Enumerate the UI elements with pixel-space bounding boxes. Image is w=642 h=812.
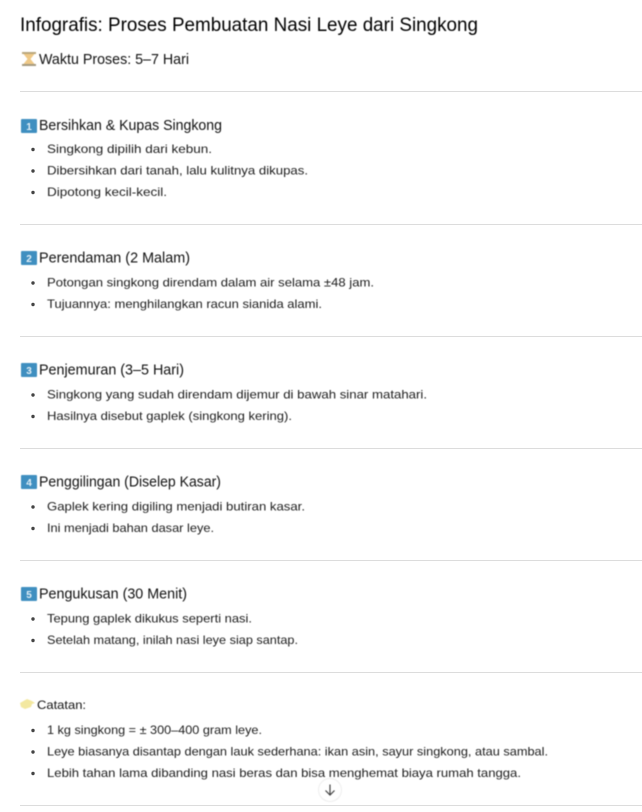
list: notes [31,724,548,780]
panel: step 2 [21,250,374,311]
icon: pointing hand [20,699,35,709]
list: notes: Leye biasanya disantap dengan lauk sederhana: ikan asin, sayur singkong, atau sambal. [47,746,548,758]
list: notes: 1 kg singkong = ± 300–400 gram leye. [47,724,262,737]
list: step 5: Tepung gaplek dikukus seperti nasi. [47,612,252,626]
process time: Waktu Proses: 5–7 Hari [39,52,189,68]
list: step 4: Gaplek kering digiling menjadi butiran kasar. [47,500,305,514]
list: step 5: Setelah matang, inilah nasi leye siap santap. [47,634,298,647]
panel: step 5 [21,586,298,647]
list: step 1: Dibersihkan dari tanah, lalu kulitnya dikupas. [47,164,308,178]
icon: number 1 [21,119,37,133]
icon: number 2 [21,251,37,265]
icon: hourglass [22,52,36,66]
list: step 2 [31,276,374,311]
list: step 4: Ini menjadi bahan dasar leye. [47,522,214,535]
panel: notes [20,699,548,780]
list: step 2: Potongan singkong direndam dalam air selama ±48 jam. [47,276,374,290]
icon: number 3: 3 [26,366,32,377]
icon: number 4 [21,475,37,489]
list: step 3: Singkong yang sudah direndam dijemur di bawah sinar matahari. [47,388,427,402]
list: step 3: Hasilnya disebut gaplek (singkong kering). [47,410,292,423]
list: step 5 [31,612,298,647]
title: Infografis: Proses Pembuatan Nasi Leye dari Singkong [20,14,478,36]
icon: number 5 [21,587,37,601]
heading: notes: Catatan: [37,699,86,712]
icon: number 4: 4 [26,478,32,489]
icon: number 5: 5 [26,590,32,601]
icon: scroll down arrow [318,778,342,802]
panel: step 4 [21,474,305,535]
heading: step 2: Perendaman (2 Malam) [39,250,190,266]
list: step 4 [31,500,305,535]
list: step 1: Singkong dipilih dari kebun. [47,143,212,156]
list: notes: Lebih tahan lama dibanding nasi beras dan bisa menghemat biaya rumah tangga. [47,767,521,780]
icon: number 1: 1 [26,122,32,133]
list: step 2: Tujuannya: menghilangkan racun sianida alami. [47,298,322,311]
list: step 1: Dipotong kecil-kecil. [47,186,167,199]
heading: step 4: Penggilingan (Diselep Kasar) [39,474,221,490]
heading: step 3: Penjemuran (3–5 Hari) [39,362,184,378]
list: step 1 [31,143,308,199]
icon: number 3 [21,363,37,377]
icon: number 2: 2 [26,254,32,265]
heading: step 1: Bersihkan & Kupas Singkong [39,118,222,134]
panel: step 3 [21,362,427,423]
heading: step 5: Pengukusan (30 Menit) [39,586,187,602]
panel: step 1 [21,118,308,199]
list: step 3 [31,388,427,423]
